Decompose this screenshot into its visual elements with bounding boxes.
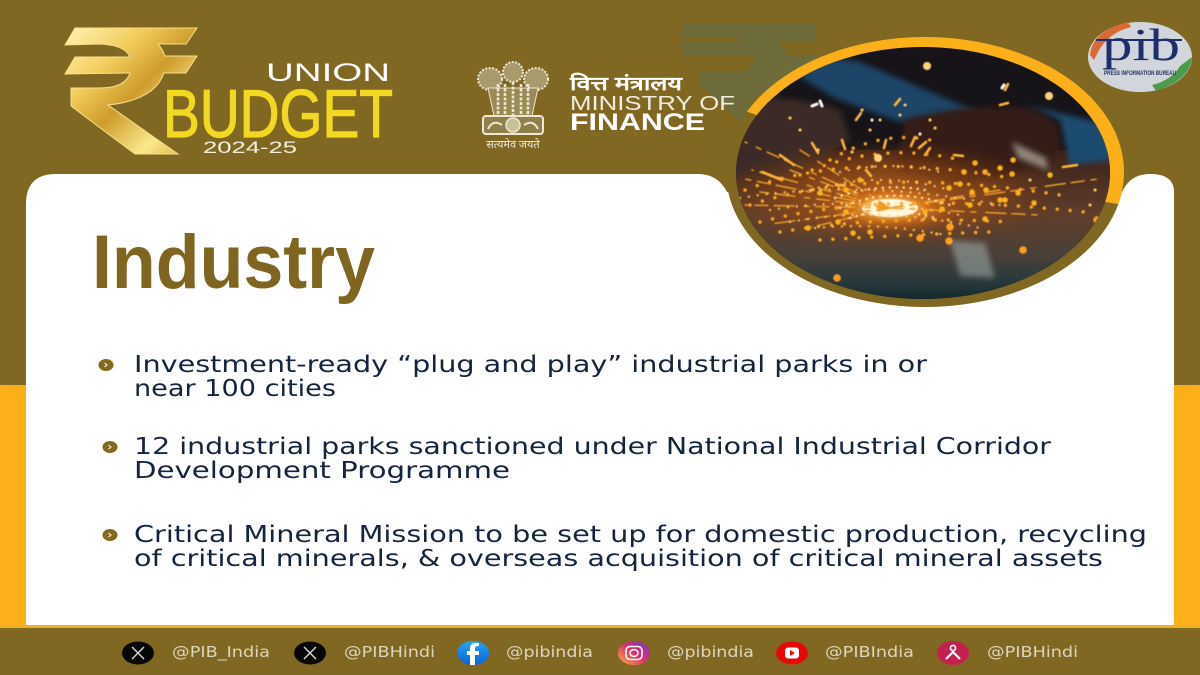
Facebook handle: @pibindia [506,643,593,661]
union budget logo [65,28,393,157]
bullet 2: 12 industrial parks sanctioned under National Industrial Corridor [134,434,1052,460]
bullet list [98,352,1147,572]
icon: national emblem [478,62,548,134]
ministry of finance label: वित्त मंत्रालय [569,72,683,95]
Instagram handle: @pibindia [667,643,754,661]
social media footer [122,641,1078,665]
icon: gold rupee [65,28,197,154]
bullet 1 [98,352,928,402]
bullet 2 [102,434,1052,484]
bullet 1: near 100 cities [134,376,336,402]
yellow side bands [0,385,1200,626]
Facebook handle [457,641,593,665]
ministry of finance label: FINANCE [570,109,705,136]
icon: PIB logo: pib [1102,19,1180,70]
bullet 3: Critical Mineral Mission to be set up for domestic production, recycling [134,522,1147,548]
heading: Industry: Industry [92,220,375,305]
YouTube handle: @PIBIndia [825,643,914,661]
bullet 2: Development Programme [134,458,510,484]
union label: UNION [266,59,390,87]
bullet 1: Investment-ready “plug and play” industrial parks in or [134,352,928,378]
upper yellow ring [746,37,1124,204]
budget label: BUDGET [163,76,393,152]
icon: PIB logo [1088,19,1192,92]
bullet 3: of critical minerals, & overseas acquisition of critical mineral assets [134,546,1103,572]
X handle India: @PIB_India [172,643,270,662]
lower ring [726,37,1124,307]
footer yellow rule [0,625,1200,628]
ministry of finance label [569,72,735,136]
year label: 2024-25 [203,138,297,157]
ministry of finance label: MINISTRY OF [570,92,735,115]
X handle Hindi [294,642,435,664]
Koo handle: @PIBHindi [987,643,1078,661]
YouTube handle [776,642,914,664]
white content panel [26,174,1174,626]
photo medallion with ring [710,37,1124,307]
bullet 3 [102,522,1147,572]
watermark rupee symbol [682,23,815,125]
X handle Hindi: @PIBHindi [344,643,435,661]
logo caption: PRESS INFORMATION BUREAU [1104,71,1176,77]
photo: welding sparks [736,47,1110,299]
Instagram handle [618,641,754,665]
X handle India [122,642,270,664]
Koo handle [937,641,1078,665]
emblem motto: सत्यमेव जयते [486,138,540,151]
